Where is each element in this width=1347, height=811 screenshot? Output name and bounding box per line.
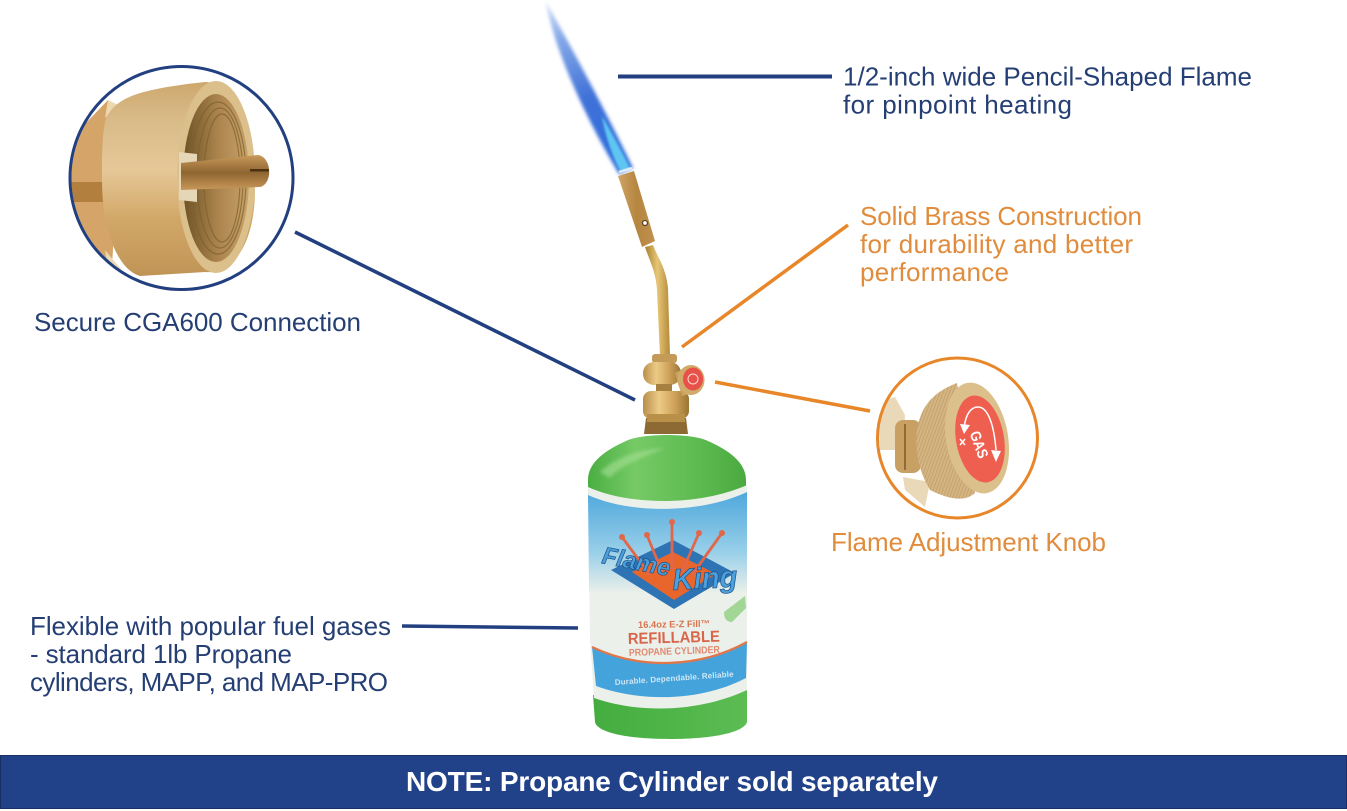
text: flame callout: 1/2-inch wide Pencil-Shaped Flame <box>843 62 1252 92</box>
logo diamond <box>600 519 738 609</box>
text: CGA600 caption: Secure CGA600 Connection <box>34 307 361 337</box>
callout line: knob <box>715 382 870 411</box>
text: flame callout <box>843 62 1252 120</box>
logo diamond: King <box>672 561 738 597</box>
note banner: NOTE: Propane Cylinder sold separately <box>406 766 938 797</box>
text: fuel gases callout: Flexible with popular fuel gases <box>30 611 391 641</box>
torch nozzle and tube <box>618 171 670 356</box>
text: brass callout: for durability and better <box>860 229 1133 259</box>
propane cylinder: Durable. Dependable. Reliable <box>615 670 734 687</box>
text: fuel gases callout: - standard 1lb Propane <box>30 639 292 669</box>
torch flame <box>546 2 633 174</box>
text: knob caption: Flame Adjustment Knob <box>831 527 1106 557</box>
propane cylinder: REFILLABLE <box>628 629 720 648</box>
text: brass callout <box>860 201 1142 287</box>
text: fuel gases callout <box>30 611 391 697</box>
leaf badge <box>724 596 746 622</box>
text: brass callout: performance <box>860 257 1009 287</box>
inset: CGA600 connection <box>60 66 293 290</box>
cylinder foot <box>593 690 747 739</box>
propane cylinder: PROPANE CYLINDER <box>629 645 721 659</box>
cylinder dome <box>588 435 746 505</box>
text: fuel gases callout: cylinders, MAPP, and MAP-PRO <box>30 667 388 697</box>
label orange line <box>592 642 747 663</box>
callout line: fuel gases <box>402 626 578 628</box>
label text: 16.4oz E-Z Fill™ <box>638 619 710 631</box>
inset: flame adjustment knob <box>878 358 1038 518</box>
valve knob <box>678 365 704 395</box>
cylinder highlight <box>600 448 665 478</box>
callout line: brass <box>682 225 848 347</box>
text: brass callout: Solid Brass Construction <box>860 201 1142 231</box>
label band <box>592 642 747 697</box>
note banner <box>0 756 1346 808</box>
cylinder label <box>588 485 747 708</box>
callout line: flame <box>618 74 832 78</box>
inset: flame adjustment knob: GAS <box>966 429 991 461</box>
label sky area <box>588 492 747 592</box>
propane cylinder <box>588 435 747 739</box>
text: flame callout: for pinpoint heating <box>843 90 1072 120</box>
torch valve body <box>643 354 698 434</box>
callout line: CGA600 <box>295 232 635 400</box>
logo diamond: Flame <box>600 542 673 582</box>
